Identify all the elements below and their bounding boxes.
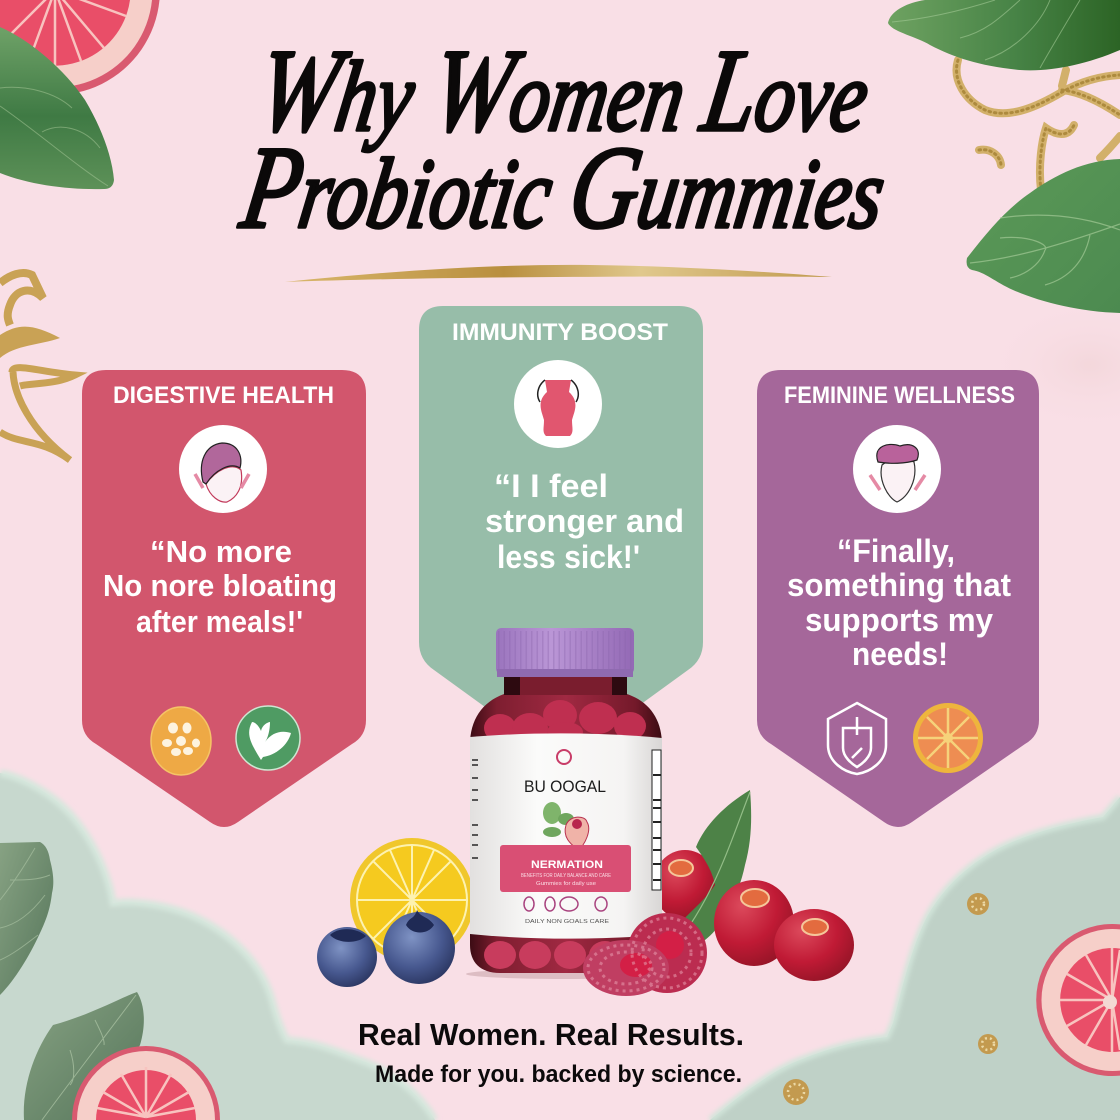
quote: something that: [787, 567, 1011, 603]
quote: after meals!': [136, 604, 303, 639]
icon: shield: [828, 703, 886, 774]
leaf top right: [888, 0, 1120, 70]
grapefruit bottom left: [72, 1046, 220, 1120]
gold flourish left: [0, 273, 75, 460]
side text: [472, 760, 478, 858]
heading: FEMININE WELLNESS: [784, 382, 1015, 409]
quote: less sick!': [497, 539, 640, 575]
icon: probiotic seeds: [151, 707, 211, 775]
quote: [103, 534, 337, 639]
bottle: [466, 628, 666, 979]
label heart and leaves: [543, 802, 589, 850]
grapefruit top left: [0, 0, 160, 95]
panel: immunity boost: [419, 306, 703, 757]
heading: DIGESTIVE HEALTH: [113, 382, 334, 409]
banner small text: BENEFITS FOR DAILY BALANCE AND CARE: [521, 873, 612, 879]
label captions: DAILY NON GOALS CARE: [525, 919, 609, 925]
cap: [496, 628, 634, 674]
quote: “No more: [150, 534, 292, 569]
icon: orange slice: [913, 703, 983, 773]
product group: [317, 628, 854, 996]
panel shape: [757, 370, 1039, 827]
icon: face: [853, 425, 941, 513]
label: Gummies for daily use: [536, 881, 596, 887]
mint wave bottom right: [710, 797, 1120, 1120]
quote: No nore bloating: [103, 568, 337, 603]
tagline: [358, 1017, 744, 1088]
gummies bottom: [484, 941, 621, 969]
label: [470, 733, 662, 939]
quote: needs!: [852, 636, 948, 672]
label icons: [524, 897, 607, 911]
label logo: [557, 750, 571, 764]
quote: stronger and: [485, 503, 684, 539]
panel shape: [419, 306, 703, 757]
quote: “I I feel: [494, 468, 608, 504]
lemon slice: [350, 838, 474, 962]
icon: face: [179, 425, 267, 513]
leaf right: [967, 159, 1120, 313]
cranberries: [714, 880, 854, 981]
leaf bottom left lower: [24, 992, 144, 1120]
panel: feminine wellness: [757, 370, 1039, 827]
title: [233, 25, 895, 253]
label banner: [500, 845, 631, 892]
tagline main: Real Women. Real Results.: [358, 1017, 744, 1052]
blueberries: [317, 910, 455, 987]
mint wave bottom left: [0, 773, 435, 1120]
neck band: [504, 676, 627, 695]
tagline sub: Made for you. backed by science.: [375, 1061, 742, 1088]
panel: digestive health: [82, 370, 366, 827]
leaf behind berries: [681, 790, 751, 940]
brand name: BU OOGAL: [524, 777, 606, 796]
banner text: NERMATION: [531, 859, 603, 871]
heading: IMMUNITY BOOST: [452, 319, 668, 346]
gold flourish top right: [957, 60, 1120, 190]
icon: green leaves: [236, 706, 300, 770]
leaf bottom left upper: [0, 842, 53, 995]
nutrition facts: [652, 750, 661, 890]
quote: “Finally,: [837, 533, 955, 569]
bottle body: [470, 675, 662, 973]
quote: [485, 468, 684, 575]
gummies top: [484, 700, 646, 743]
gold divider: [285, 265, 832, 282]
raspberries: [583, 913, 707, 996]
leaf top left: [0, 27, 114, 189]
cranberry behind bottle: [653, 850, 717, 920]
title line 1: Why Women Love: [250, 25, 879, 156]
soft shadow right: [980, 295, 1120, 435]
quote: supports my: [805, 602, 993, 638]
gold dots: [783, 893, 998, 1105]
panel shape: [82, 370, 366, 827]
icon: body: [514, 360, 602, 448]
grapefruit bottom right: [1036, 924, 1120, 1076]
quote: [787, 533, 1011, 672]
title line 2: Probiotic Gummies: [233, 122, 895, 253]
